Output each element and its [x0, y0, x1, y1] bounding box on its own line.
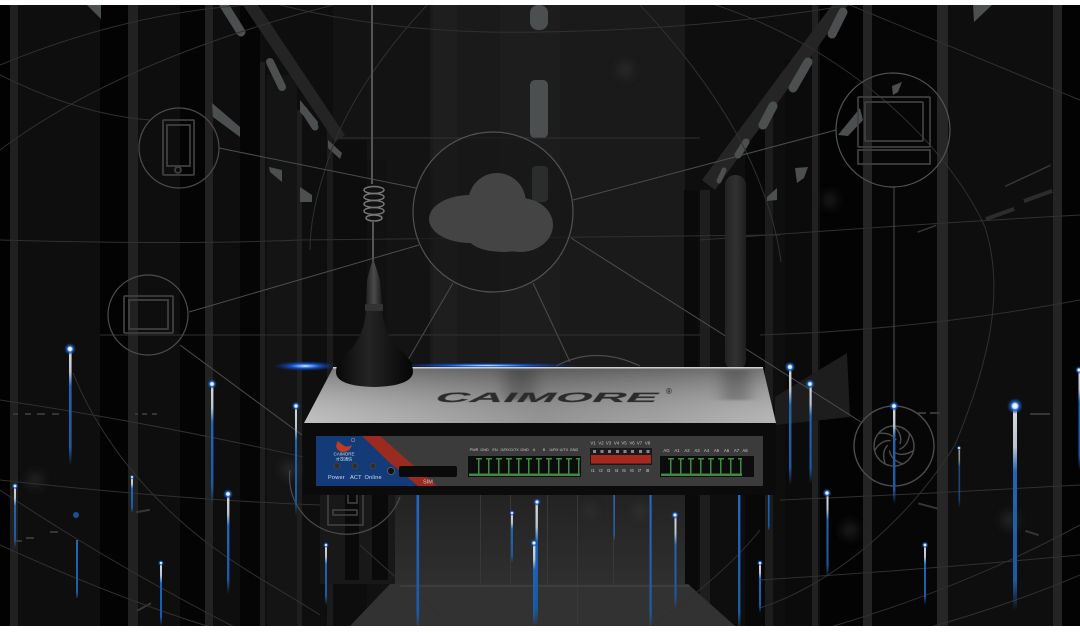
- ceiling lights: [87, 5, 992, 202]
- node: camera lens: [854, 406, 934, 486]
- terminal labels: serial: D/TX: [510, 448, 519, 452]
- terminal labels: analog: A3: [694, 448, 700, 453]
- terminal labels: analog: A7: [734, 448, 740, 453]
- terminal labels: serial: GND: [570, 448, 578, 452]
- terminal labels: serial: U/TX: [560, 448, 569, 452]
- terminal labels: V channels: V7: [637, 440, 643, 446]
- node: arc behind router: [556, 356, 640, 366]
- terminal block: analog: [660, 456, 754, 477]
- light beams right: [784, 362, 1080, 611]
- LED labels: Power: [328, 475, 345, 481]
- terminal labels: I channels: I6: [630, 468, 634, 473]
- antenna stem: [366, 258, 382, 307]
- terminal labels: V channels: V2: [598, 440, 604, 446]
- router: ACT: [350, 475, 362, 481]
- blue flare: centre: [392, 363, 582, 368]
- front panel: [316, 436, 763, 486]
- light beams centre: [323, 490, 770, 626]
- node: storage behind router: [290, 470, 400, 534]
- terminal labels: analog: A2: [684, 448, 690, 453]
- terminal labels: V channels: V4: [614, 440, 620, 446]
- antenna collar: [365, 304, 383, 311]
- terminal labels: V channels: V1: [590, 440, 596, 446]
- terminal labels: V channels: V5: [621, 440, 627, 446]
- terminal labels: I channels: I2: [599, 468, 603, 473]
- logo: [333, 438, 355, 462]
- terminal labels: serial: [470, 448, 578, 452]
- registered mark: ®: [666, 387, 672, 396]
- whip wire: [372, 5, 373, 262]
- coil: [364, 186, 384, 221]
- status LEDs: [334, 463, 376, 469]
- brand name on lid: CAIMORE: [431, 390, 664, 405]
- blue flare: left: [273, 361, 337, 371]
- rack status lights: [13, 165, 1053, 612]
- terminal labels: I channels: I1: [591, 468, 595, 473]
- node: tablet: [108, 275, 188, 355]
- terminal labels: serial: U/RX: [549, 448, 559, 452]
- terminal labels: analog: A6: [724, 448, 730, 453]
- SIM label: SIM: [423, 480, 433, 486]
- terminal labels: serial: B: [543, 448, 546, 452]
- terminal labels: analog: A5: [714, 448, 720, 453]
- terminal labels: V channels: [590, 440, 651, 446]
- terminal labels: V channels: V6: [629, 440, 635, 446]
- node: phone: [139, 108, 219, 188]
- terminal labels: analog: AG: [663, 448, 670, 453]
- reset button: [388, 468, 394, 474]
- terminal labels: I channels: I7: [638, 468, 642, 473]
- terminal labels: serial: GND: [480, 448, 489, 452]
- front housing: [303, 423, 776, 495]
- logo: CAIMORE: [333, 452, 355, 456]
- terminal labels: V channels: V8: [645, 440, 651, 446]
- light beams left: [12, 343, 300, 626]
- red stripe: [362, 436, 437, 486]
- terminal labels: I channels: I5: [622, 468, 626, 473]
- terminal labels: serial: G/RX: [500, 448, 510, 452]
- terminal labels: I channels: I4: [615, 468, 619, 473]
- terminal labels: serial: EN: [492, 448, 498, 452]
- node: monitor: [836, 73, 950, 187]
- network connector lines: [180, 130, 894, 435]
- terminal labels: I channels: I3: [607, 468, 611, 473]
- router: [303, 367, 776, 495]
- blue label area: [316, 436, 420, 486]
- terminal labels: analog: A1: [674, 448, 680, 453]
- logo: 才茂通信: [336, 456, 352, 462]
- terminal labels: V channels: V3: [606, 440, 612, 446]
- terminal labels: analog: [663, 448, 748, 453]
- terminal labels: serial: GND: [520, 448, 529, 452]
- router: Online: [364, 475, 382, 481]
- terminal labels: I channels: I8: [646, 468, 650, 473]
- DIP switch block: [590, 448, 652, 465]
- magnet base: [336, 311, 413, 387]
- router top surface: [304, 367, 776, 423]
- terminal labels: analog: A8: [742, 448, 748, 453]
- magnetic whip antenna: [336, 5, 413, 387]
- right antenna: [725, 175, 746, 370]
- terminal labels: serial: PWR: [470, 448, 479, 452]
- node: cloud: [413, 132, 573, 292]
- terminal block: serial: [468, 456, 581, 477]
- terminal labels: I channels: [591, 468, 650, 473]
- terminal labels: serial: A: [533, 448, 536, 452]
- cloud shape: [429, 173, 553, 252]
- terminal labels: analog: A4: [704, 448, 710, 453]
- SIM slot: [399, 466, 457, 477]
